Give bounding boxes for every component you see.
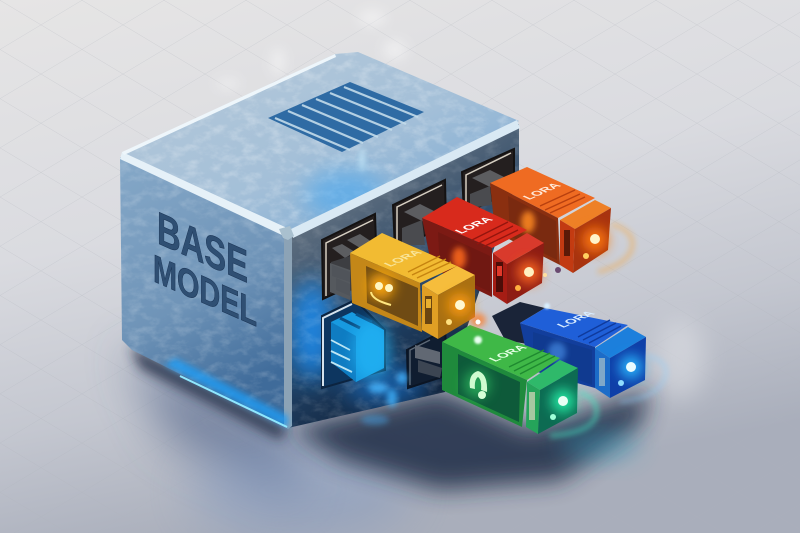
sparks: junction between modules [470,303,550,344]
connector: blue module socket [492,302,545,345]
module: blue LoRA [492,302,666,402]
port: green [407,330,448,388]
module: green LoRA [442,325,597,436]
sparks: blue [620,356,666,402]
sparks: orange [598,224,633,272]
cube left face [120,157,284,424]
port: holographic blue module [322,300,392,388]
module: orange LoRA [490,167,633,273]
icon: top vent grille [268,82,424,152]
glow: red lens [515,260,541,291]
cube top face [126,52,519,229]
label: LORA orange: LORA [520,181,564,201]
glow: yellow lens [446,293,472,325]
label: LORA green: LORA [486,343,530,363]
sparks: electric blue energy [361,372,407,425]
connector pins: yellow [332,265,350,296]
heading: BASE engraved: BASE [157,202,248,294]
cube bevelled highlights [120,54,520,240]
glow: blue lens [618,355,643,386]
label: LORA red: LORA [452,215,496,235]
glow: green lens [550,389,575,420]
port: red [393,180,446,250]
cube right face [280,120,520,430]
module: red LoRA [422,197,561,304]
heading: MODEL engraved: MODEL [153,246,257,335]
wisps of vapour above cube [216,10,407,89]
glowing bottom edge [165,358,288,428]
floor shadow under cube and modules [125,320,705,533]
base model cube [110,45,530,435]
ports in cube right face [322,149,514,425]
glow: yellow panel icon [368,273,394,305]
glow: orange lens [582,227,608,259]
label: LORA yellow: LORA [381,248,425,268]
port: orange [462,149,514,214]
module: yellow LoRA [332,233,475,339]
sparks: green [550,392,597,436]
label: LORA blue: LORA [554,309,598,329]
sparks: red [543,267,561,277]
port: yellow [322,214,377,300]
icon: green panel symbol [464,370,490,399]
